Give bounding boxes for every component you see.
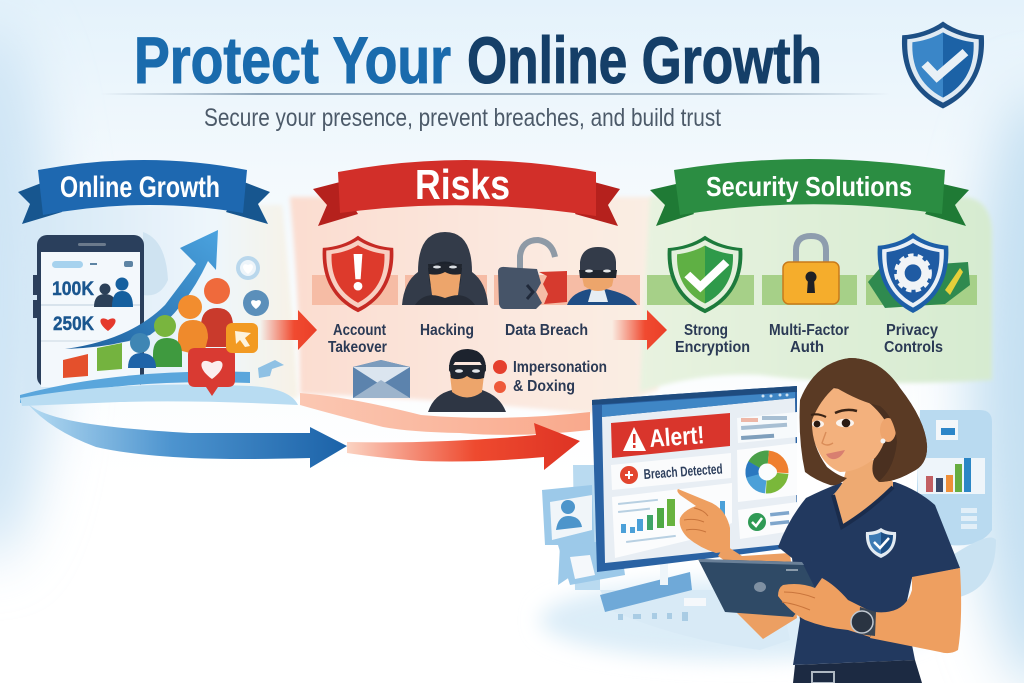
- label: multi-factor auth: Auth: [790, 339, 824, 356]
- icon: broken padlock: [498, 240, 567, 309]
- icon: account takeover shield: [323, 236, 393, 312]
- panel: online growth: [22, 205, 298, 398]
- label: impersonation and doxing: [493, 359, 607, 395]
- belt: [793, 660, 922, 683]
- panel: risks: [290, 197, 658, 414]
- label: privacy controls: Controls: [884, 339, 943, 356]
- hair front: [800, 358, 927, 485]
- arrow: blue lower sweep: [27, 403, 347, 468]
- breach detected row: Breach Detected: [643, 461, 723, 482]
- status check card: [738, 502, 798, 539]
- icon: padlock: [783, 236, 839, 304]
- alert banner: [611, 413, 730, 458]
- background: dashboard haze: [542, 410, 996, 650]
- icon: audience figures: [128, 278, 233, 368]
- pointing hand: [677, 489, 730, 553]
- illustration: woman: [677, 358, 961, 683]
- subtitle: Secure your presence, prevent breaches, and build trust: [204, 104, 721, 132]
- chart: growth bars: [63, 343, 122, 378]
- banner: online growth: Online Growth: [60, 171, 220, 204]
- arrow: risks to solutions: [612, 310, 667, 350]
- icon: heart bubble: [188, 348, 235, 396]
- label: impersonation and doxing: & Doxing: [513, 378, 575, 395]
- label: privacy controls: Privacy: [886, 322, 938, 339]
- right hand: [778, 578, 872, 637]
- illustration: phone: 100K: [52, 279, 94, 300]
- watch: [851, 607, 876, 636]
- banner: risks: Risks: [415, 161, 510, 208]
- icon: hacker: [402, 232, 488, 305]
- tablet: [698, 559, 815, 617]
- strips: solutions: [647, 275, 977, 305]
- banner: security solutions: [650, 159, 969, 226]
- label: account takeover: Takeover: [328, 339, 387, 356]
- label: strong encryption: [675, 322, 750, 356]
- label: impersonation and doxing: Impersonation: [513, 359, 607, 376]
- icon: heart circle: [236, 256, 260, 280]
- banner: online growth: [18, 160, 270, 224]
- face: [810, 388, 888, 472]
- eyes and brows: [811, 414, 826, 417]
- label: data breach: Data Breach: [505, 322, 588, 339]
- panel: security solutions: [640, 197, 992, 392]
- strips: risks: [312, 275, 640, 305]
- icon: envelope: [353, 360, 410, 398]
- icon: impersonator: [428, 349, 506, 412]
- icon: masked man: [567, 247, 637, 305]
- shirt: [778, 482, 960, 665]
- red wave band: [300, 393, 590, 435]
- title: [134, 23, 822, 97]
- illustration: swoosh base: [20, 371, 298, 406]
- icon: orange badge: [226, 323, 258, 353]
- label: account takeover: [328, 322, 387, 356]
- left arm: [718, 545, 797, 639]
- label: strong encryption: Encryption: [675, 339, 750, 356]
- label: strong encryption: Strong: [684, 322, 728, 339]
- illustration: phone: 250K: [53, 314, 94, 335]
- nose and lips: [822, 432, 833, 445]
- icon: small blue tag: [258, 360, 284, 378]
- dashboard list card: [737, 412, 797, 443]
- right arm: [870, 568, 961, 653]
- icon: heart circle blue: [243, 290, 269, 316]
- illustration: phone: [33, 232, 168, 387]
- banner: security solutions: Security Solutions: [706, 171, 912, 202]
- arrow: growth to risks: [260, 310, 317, 350]
- label: account takeover: Account: [333, 322, 387, 339]
- alert banner: Alert!: [648, 421, 705, 453]
- neck: [833, 460, 893, 527]
- icon: header shield: [902, 21, 984, 109]
- title: Protect Your: [134, 23, 451, 97]
- ear: [880, 418, 896, 442]
- icon: encryption shield: [668, 236, 742, 313]
- monitor bar chart: [612, 483, 732, 558]
- donut chart: [737, 443, 797, 502]
- label: multi-factor auth: Multi-Factor: [769, 322, 849, 339]
- title: Online Growth: [467, 23, 822, 97]
- arrow: red lower sweep: [347, 423, 580, 470]
- label: hacking: Hacking: [420, 322, 474, 339]
- breach detected row: [611, 453, 731, 490]
- illustration: alert monitor: [592, 386, 797, 585]
- icon: privacy shield: [868, 233, 970, 313]
- icon: growth arrow: [65, 230, 218, 349]
- panel: right dashboard chart: [918, 420, 985, 529]
- shirt shield: [866, 528, 896, 558]
- label: privacy controls: [884, 322, 943, 356]
- label: multi-factor auth: [769, 322, 849, 356]
- banner: risks: [313, 160, 620, 226]
- hair back: [815, 358, 927, 482]
